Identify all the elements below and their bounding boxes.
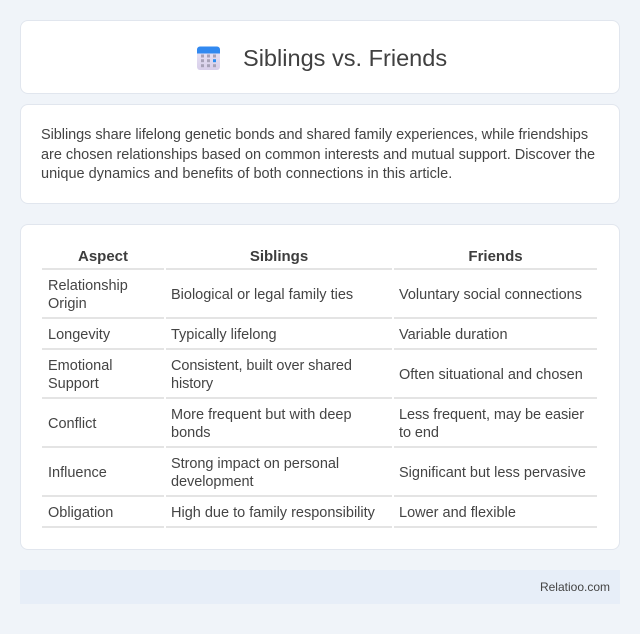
footer bar xyxy=(20,570,620,604)
siblings: conflict: bonds xyxy=(171,425,211,441)
title: Siblings vs. Friends xyxy=(243,45,447,71)
row: relationship origin xyxy=(48,278,128,312)
row: obligation: Obligation xyxy=(48,505,113,521)
panel: introduction xyxy=(20,104,620,204)
intro text: Siblings share lifelong genetic bonds and shared family experiences, while friendships xyxy=(41,127,588,143)
intro text xyxy=(41,127,595,182)
siblings: influence: development xyxy=(171,474,253,490)
intro text: are chosen relationships based on common interests and mutual support. Discover the xyxy=(41,146,595,162)
friends: conflict xyxy=(399,407,584,441)
friends: obligation: Lower and flexible xyxy=(399,505,516,521)
table header: friends: Friends xyxy=(468,248,523,265)
siblings: conflict xyxy=(171,407,352,441)
row: emotional support xyxy=(48,358,112,392)
footer credit: Relatioo.com xyxy=(540,580,610,594)
siblings: emotional support: Consistent, built over shared xyxy=(171,358,352,374)
table header: aspect: Aspect xyxy=(78,248,128,265)
siblings: obligation: High due to family responsibility xyxy=(171,505,375,521)
row: conflict: Conflict xyxy=(48,416,96,432)
icon: calendar xyxy=(197,46,220,70)
table header: siblings: Siblings xyxy=(250,248,308,265)
row: relationship origin: Origin xyxy=(48,296,87,312)
row: emotional support: Support xyxy=(48,376,99,392)
siblings: influence xyxy=(171,456,339,490)
friends: conflict: to end xyxy=(399,425,439,441)
panel: comparison table xyxy=(20,224,620,550)
row: longevity: Longevity xyxy=(48,327,110,343)
siblings: influence: Strong impact on personal xyxy=(171,456,339,472)
siblings: emotional support xyxy=(171,358,352,392)
friends: emotional support: Often situational and chosen xyxy=(399,367,583,383)
row: relationship origin: Relationship xyxy=(48,278,128,294)
friends: relationship origin: Voluntary social connections xyxy=(399,287,582,303)
row: emotional support: Emotional xyxy=(48,358,112,374)
panel: title card xyxy=(20,20,620,94)
siblings: emotional support: history xyxy=(171,376,213,392)
row: influence: Influence xyxy=(48,465,107,481)
siblings: conflict: More frequent but with deep xyxy=(171,407,352,423)
siblings: longevity: Typically lifelong xyxy=(171,327,277,343)
friends: conflict: Less frequent, may be easier xyxy=(399,407,584,423)
intro text: unique dynamics and benefits of both connections in this article. xyxy=(41,166,452,182)
friends: influence: Significant but less pervasive xyxy=(399,465,586,481)
friends: longevity: Variable duration xyxy=(399,327,508,343)
siblings: relationship origin: Biological or legal family ties xyxy=(171,287,353,303)
